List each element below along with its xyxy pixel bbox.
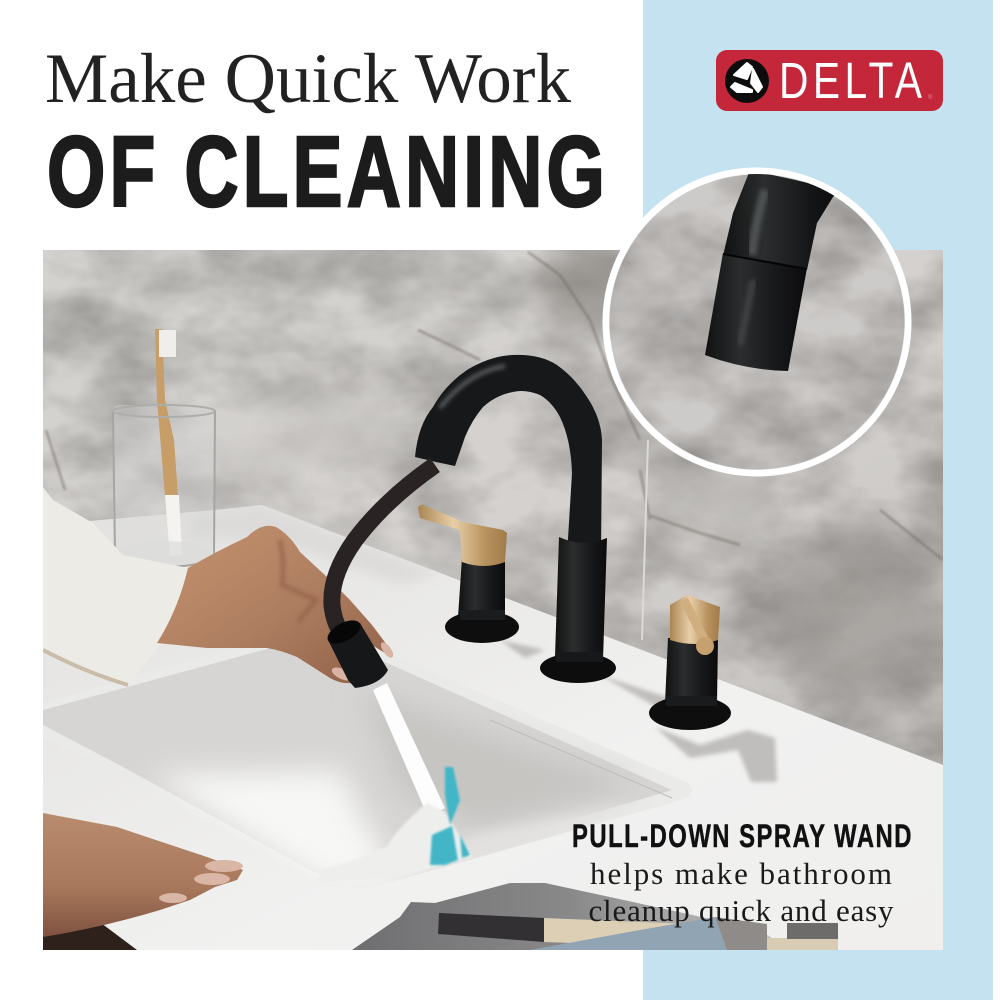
toothbrush and glass (113, 329, 215, 567)
sleeve (43, 487, 188, 685)
right handle (649, 595, 731, 730)
counter shadows (500, 640, 777, 782)
sink (43, 648, 672, 878)
title: Make Quick Work (45, 40, 571, 118)
wood strip bottom left (43, 925, 137, 950)
caption: PULL-DOWN SPRAY WAND (572, 818, 913, 854)
hose (332, 465, 435, 638)
caption: cleanup quick and easy (588, 893, 894, 928)
logo: Delta (716, 50, 943, 111)
marble wall (43, 250, 950, 780)
blue toothpaste (430, 767, 470, 865)
lower hand (43, 813, 243, 937)
water stream (373, 683, 445, 817)
caption (572, 818, 913, 928)
towel and brush (352, 883, 838, 950)
hand holding wand (157, 526, 395, 683)
logo: Delta: DELTA (779, 52, 926, 109)
left handle (418, 505, 519, 643)
caption: helps make bathroom (590, 856, 892, 891)
counter back shadow on left (216, 506, 424, 582)
inset circle: spray wand close-up (605, 170, 909, 474)
title (45, 40, 609, 227)
counter (43, 505, 943, 950)
product photo (43, 250, 950, 950)
splash (378, 804, 472, 876)
icon: delta triangle mark (725, 59, 769, 103)
logo: Delta: ® (928, 94, 933, 101)
faucet spout (415, 355, 616, 683)
wand head (328, 620, 388, 688)
blue side panel (643, 0, 993, 1000)
title: OF CLEANING (47, 115, 609, 227)
